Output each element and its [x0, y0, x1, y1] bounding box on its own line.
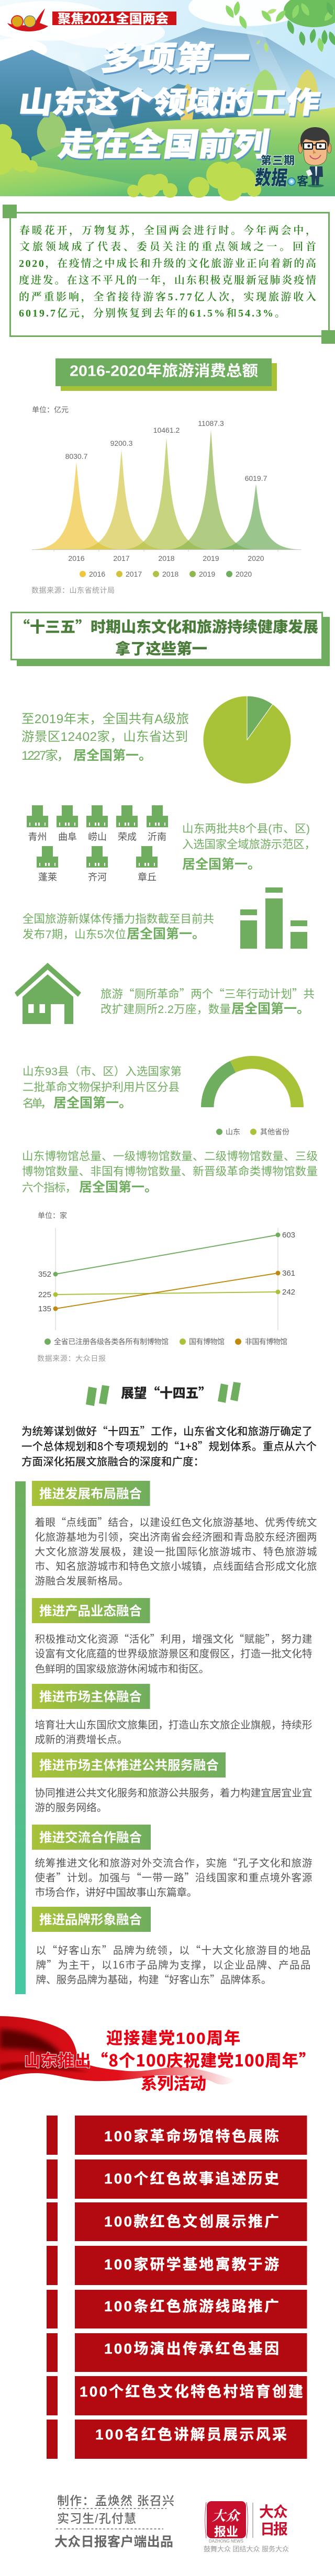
- chart legend: 2019: [199, 570, 215, 578]
- chart: museum slope lines: 242: [282, 1288, 295, 1297]
- text: brand image: 牌”为主干，以16市子品牌为支撑，以企业品牌、产品品: [36, 1956, 311, 1972]
- chart: museum slope lines: 352: [38, 1270, 51, 1279]
- chart: tourism consumption spikes: 6019.7: [245, 474, 267, 482]
- logo: Dazhong News: 大众: [259, 2504, 288, 2520]
- text: revolutionary relic districts: 居全国第一。: [53, 1096, 132, 1110]
- heading: thirteenth five-year firsts: [12, 612, 330, 666]
- tab: market entities: [32, 1684, 150, 1709]
- row 4: [47, 2246, 307, 2285]
- credits: 实习生/孔付慧: [57, 2512, 136, 2525]
- heading: thirteenth five-year firsts: “十三五”时期山东文化和旅游持续健康发展: [15, 615, 318, 637]
- chart: tourism consumption spikes: 2019: [203, 554, 219, 563]
- text: museums: 居全国第一。: [79, 1180, 158, 1195]
- icons: eight demonstration counties: [27, 805, 168, 882]
- chart legend: 2017: [126, 570, 142, 578]
- text: exchange and cooperation: 统筹推进文化和旅游对外交流合作，实施“孔子文化和旅游: [35, 1854, 312, 1870]
- chart: tourism consumption spikes: 9200.3: [110, 439, 133, 447]
- line chart legend: [44, 1337, 287, 1346]
- text: toilet revolution: 旅游“厕所革命”两个“三年行动计划”共: [100, 985, 315, 1002]
- text: development layout: [35, 1514, 317, 1587]
- issue badge: 数据: [254, 162, 289, 190]
- tab: public services: [32, 1752, 226, 1778]
- row 1: 100家革命场馆特色展陈: [104, 2128, 279, 2144]
- text: A-level scenic areas: 至2019年末，全国共有A级旅: [21, 712, 189, 726]
- icon: data guest character: [298, 127, 331, 187]
- text: museums: [22, 1150, 318, 1195]
- text: planning intro: 为统筹谋划做好“十四五”工作，山东省文化和旅游厅确定了: [21, 1422, 312, 1438]
- icons: eight demonstration counties: 青州: [28, 832, 47, 842]
- text: exchange and cooperation: 使者”计划。加强与“一带一路”沿线国家和重点境外客源: [35, 1869, 312, 1884]
- heading: tourism consumption: [55, 358, 277, 391]
- chart: tourism consumption spikes: 2018: [158, 554, 175, 563]
- icons: eight demonstration counties: 曲阜: [58, 832, 77, 842]
- chart: museum slope lines: 225: [38, 1290, 51, 1299]
- chart: museum slope lines: 361: [282, 1269, 295, 1278]
- tab: product forms: [32, 1598, 150, 1623]
- text: revolutionary relic districts: 二批革命文物保护利用片区分县: [23, 1081, 180, 1094]
- tab: product forms: 推进产品业态融合: [39, 1604, 142, 1618]
- heading: party centenary: [24, 2029, 315, 2093]
- text: museums: 六个指标，: [22, 1182, 76, 1194]
- credits: 制作：孟焕然 张召兴: [57, 2494, 174, 2507]
- text: A-level scenic areas: 游景区12402家，山东省达到: [21, 729, 188, 744]
- text: demonstration zones: 居全国第一。: [182, 857, 261, 872]
- chart: museum slope lines: [37, 1211, 295, 1363]
- row 8: 100名红色讲解员展示风采: [95, 2426, 287, 2443]
- text: development layout: 化旅游基地为引领，突出济南省会经济圈和青岛胶东经济圈两: [35, 1532, 317, 1543]
- light beams: [63, 31, 298, 196]
- text: planning intro: 一个总体规划和8个专项规划的“1+8”规划体系。重点从六个: [21, 1438, 317, 1454]
- text: revolutionary relic districts: 名单，: [23, 1097, 52, 1110]
- heading: tourism consumption: 2016-2020年旅游消费总额: [70, 362, 258, 380]
- line chart legend: 全省已注册各级各类各所有制博物馆: [54, 1337, 169, 1346]
- text: demonstration zones: [182, 823, 316, 872]
- chart legend: [80, 570, 252, 578]
- icons: eight demonstration counties: 章丘: [138, 872, 157, 882]
- text: A-level scenic areas: 居全国第一。: [73, 748, 152, 763]
- panel: six integrations: [15, 1481, 317, 1994]
- chart: tourism consumption spikes: 2016: [68, 554, 85, 563]
- chart legend: 2016: [89, 570, 105, 578]
- row 8: [47, 2420, 307, 2459]
- row 2: [47, 2159, 307, 2199]
- title: 走在全国前列: [56, 119, 272, 165]
- text: toilet revolution: 居全国第一。: [231, 1002, 310, 1016]
- logo: Dazhong News: DAZHONG NEWS: [209, 2539, 243, 2544]
- text: A-level scenic areas: 1227家，: [21, 748, 70, 763]
- green hills: [31, 107, 335, 196]
- donut legend: 其他省份: [260, 1128, 289, 1136]
- line chart legend: 非国有博物馆: [245, 1337, 287, 1346]
- text: new media index: 发布7期，山东5次位: [23, 928, 126, 941]
- icons: eight demonstration counties: 荣成: [118, 832, 137, 842]
- header badge: 聚焦2021全国两会: [58, 8, 169, 27]
- tab: brand image: 推进品牌形象融合: [39, 1913, 142, 1927]
- text: market entities: 培育壮大山东国欣文旅集团，打造山东文旅企业旗舰，持续形: [35, 1719, 312, 1731]
- list: eight 100 activities: [47, 2116, 307, 2459]
- back mountain: [63, 27, 335, 120]
- credits: 大众日报客户端出品: [54, 2534, 173, 2549]
- text: new media index: 全国旅游新媒体传播力指数截至目前共: [23, 913, 214, 925]
- text: brand image: 以“好客山东”品牌为统领，以“十大文化旅游目的地品: [36, 1942, 311, 1957]
- text: public services: 游的服务网络。: [35, 1802, 107, 1814]
- intro text: 6019.7亿元，分别恢复到去年的61.5%和54.3%。: [19, 307, 285, 319]
- issue badge: [254, 152, 308, 190]
- issue badge: 客: [297, 172, 308, 189]
- text: product forms: 积极推动文化资源“活化”利用，增强文化“赋能”，努力建: [35, 1630, 312, 1646]
- row 3: 100款红色文创展示推广: [104, 2213, 279, 2230]
- intro text: 文旅领域成了代表、委员关注的重点领域之一。回首: [19, 240, 316, 253]
- text: public services: 协同推进公共文化服务和旅游公共服务，着力构建宜居宜业宜: [35, 1787, 312, 1799]
- text: museums: 博物馆数量、非国有博物馆数量、新晋级革命类博物馆数量: [22, 1165, 318, 1178]
- text: market entities: [35, 1719, 312, 1746]
- text: public services: [35, 1787, 312, 1814]
- row 6: 100场演出传承红色基因: [104, 2341, 279, 2357]
- decoration: red ribbon: [0, 2016, 236, 2085]
- hero banner: [0, 0, 335, 201]
- row 4: 100家研学基地寓教于游: [104, 2256, 279, 2273]
- text: museums: 山东博物馆总量、一级博物馆数量、二级博物馆数量、三级: [22, 1150, 318, 1163]
- title: 山东这个领域的工作: [16, 79, 323, 121]
- text: brand image: [36, 1942, 311, 1986]
- row 7: [47, 2376, 307, 2415]
- row 2: 100个红色故事追述历史: [104, 2170, 279, 2187]
- row 3: [47, 2202, 307, 2241]
- heading: outlook: [86, 1382, 241, 1406]
- tab: brand image: [32, 1907, 151, 1932]
- chart: tourism consumption spikes: 数据来源：山东省统计局: [31, 586, 115, 594]
- front mountain: [0, 50, 241, 167]
- heading: party centenary: 山东推出“8个100庆祝建党100周年”: [24, 2048, 315, 2071]
- chart: museum slope lines: 数据来源：大众日报: [37, 1354, 106, 1363]
- chart: museum slope lines: 135: [38, 1304, 51, 1313]
- text: toilet revolution: [100, 985, 315, 1016]
- party congress emblems: [7, 8, 48, 31]
- row 5: [47, 2290, 307, 2328]
- heading: party centenary: 迎接建党100周年: [106, 2029, 240, 2048]
- chart: tourism consumption spikes: 单位：亿元: [32, 406, 69, 414]
- row 7: 100个红色文化特色村培育创建: [80, 2383, 303, 2400]
- text: revolutionary relic districts: 山东93县（市、区）入选国家第: [23, 1065, 182, 1078]
- chart: tourism consumption spikes: 2020: [248, 554, 264, 563]
- chart: tourism consumption spikes: 2017: [113, 554, 130, 563]
- line chart legend: 国有博物馆: [189, 1337, 225, 1346]
- heading: thirteenth five-year firsts: 拿了这些第一: [115, 637, 207, 659]
- donut legend: 山东: [226, 1128, 240, 1136]
- heading: party centenary: 系列活动: [141, 2075, 206, 2093]
- issue badge: 第三期: [261, 152, 295, 168]
- chart legend: 2018: [162, 570, 178, 578]
- text: product forms: 设富有文化底蕴的世界级旅游景区和度假区，打造一批文化特: [35, 1648, 312, 1660]
- icons: eight demonstration counties: 沂南: [148, 832, 166, 842]
- logo: Dazhong News: 报业: [214, 2525, 238, 2538]
- text: development layout: 着眼“点线面”结合，以建设红色文化旅游基地、优秀传统文: [35, 1514, 317, 1529]
- title: [16, 32, 323, 165]
- right trees: [251, 70, 278, 120]
- chart: tourism consumption spikes: 8030.7: [65, 452, 88, 460]
- text: exchange and cooperation: 市场合作，讲好中国故事山东篇章。: [35, 1887, 197, 1898]
- text: product forms: 色鲜明的国家级旅游休闲城市和街区。: [35, 1663, 209, 1675]
- text: toilet revolution: 改扩建厕所2.2万座，数量: [100, 1003, 231, 1016]
- row 6: [47, 2333, 307, 2372]
- logo: Dazhong News: 鼓舞大众 团结大众 服务大众: [204, 2545, 289, 2553]
- text: demonstration zones: 入选国家全域旅游示范区，: [182, 838, 316, 851]
- text: development layout: 市、知名旅游城市和特色文旅小城镇，点线面结合形成文化旅: [35, 1561, 317, 1572]
- text: brand image: 牌、服务品牌为基础，构建“好客山东”品牌体系。: [36, 1971, 271, 1986]
- text: A-level scenic areas: [21, 712, 189, 763]
- text: planning intro: 方面深化拓展文旅融合的深度和广度：: [21, 1453, 204, 1468]
- text: exchange and cooperation: [35, 1854, 312, 1898]
- tab: exchange and cooperation: 推进交流合作融合: [39, 1830, 142, 1845]
- icons: eight demonstration counties: 齐河: [88, 872, 107, 882]
- chart: tourism consumption spikes: 11087.3: [198, 419, 224, 428]
- icon: house: [15, 963, 81, 1024]
- text: revolutionary relic districts: [23, 1065, 182, 1110]
- row 5: 100条红色旅游线路推广: [104, 2298, 279, 2314]
- title: 多项第一: [99, 32, 253, 80]
- chart: half donut: [201, 1056, 304, 1136]
- text: planning intro: [21, 1422, 317, 1468]
- intro text: [19, 224, 316, 319]
- icons: eight demonstration counties: 崂山: [88, 832, 107, 842]
- logo: Dazhong News: 日报: [260, 2521, 288, 2537]
- chart: museum slope lines: 603: [282, 1231, 295, 1240]
- heading: outlook: 展望“十四五”: [121, 1383, 211, 1402]
- logo: Dazhong News: 大众: [212, 2505, 241, 2525]
- intro text: 度进发。在这不平凡的一年，山东积极克服新冠肺炎疫情: [19, 274, 316, 286]
- chart: scenic area pie: [203, 696, 291, 784]
- intro text: 春暖花开，万物复苏，全国两会进行时。今年两会中，: [19, 224, 316, 237]
- logo: Dazhong News: [204, 2501, 289, 2553]
- text: product forms: [35, 1630, 312, 1675]
- intro text: 的严重影响，全省接待游客5.77亿人次，实现旅游收入: [19, 291, 316, 303]
- text: development layout: 游融合发展新格局。: [35, 1576, 129, 1587]
- top leaves: [224, 0, 335, 87]
- intro text: 2020，在疫情之中成长和升级的文化旅游业正向着新的高: [19, 257, 316, 269]
- donut legend: [216, 1128, 289, 1136]
- text: demonstration zones: 山东两批共8个县(市、区): [182, 823, 310, 835]
- chart legend: 2020: [236, 570, 252, 578]
- tab: market entities: 推进市场主体融合: [39, 1690, 142, 1704]
- row 1: [47, 2116, 307, 2155]
- tab: exchange and cooperation: [32, 1825, 151, 1850]
- bushes: [0, 124, 261, 201]
- clouds: [0, 0, 304, 61]
- tab: development layout: 推进发展布局融合: [39, 1487, 142, 1501]
- tab: development layout: [32, 1481, 150, 1506]
- text: new media index: [23, 913, 214, 941]
- icon: bars: [240, 887, 307, 949]
- credits: [54, 2494, 174, 2549]
- text: market entities: 成新的消费增长点。: [35, 1734, 128, 1746]
- chart: tourism consumption spikes: 10461.2: [153, 426, 180, 434]
- chart: tourism consumption spikes: [31, 406, 301, 594]
- tab: public services: 推进市场主体推进公共服务融合: [39, 1758, 219, 1773]
- panel: intro box: [3, 205, 335, 344]
- text: new media index: 居全国第一。: [127, 927, 205, 941]
- icons: eight demonstration counties: 蓬莱: [38, 872, 57, 882]
- text: development layout: 大文化旅游发展极，建设一批国际化旅游城市、特色旅游城: [35, 1546, 317, 1558]
- chart: museum slope lines: 单位：家: [38, 1211, 67, 1220]
